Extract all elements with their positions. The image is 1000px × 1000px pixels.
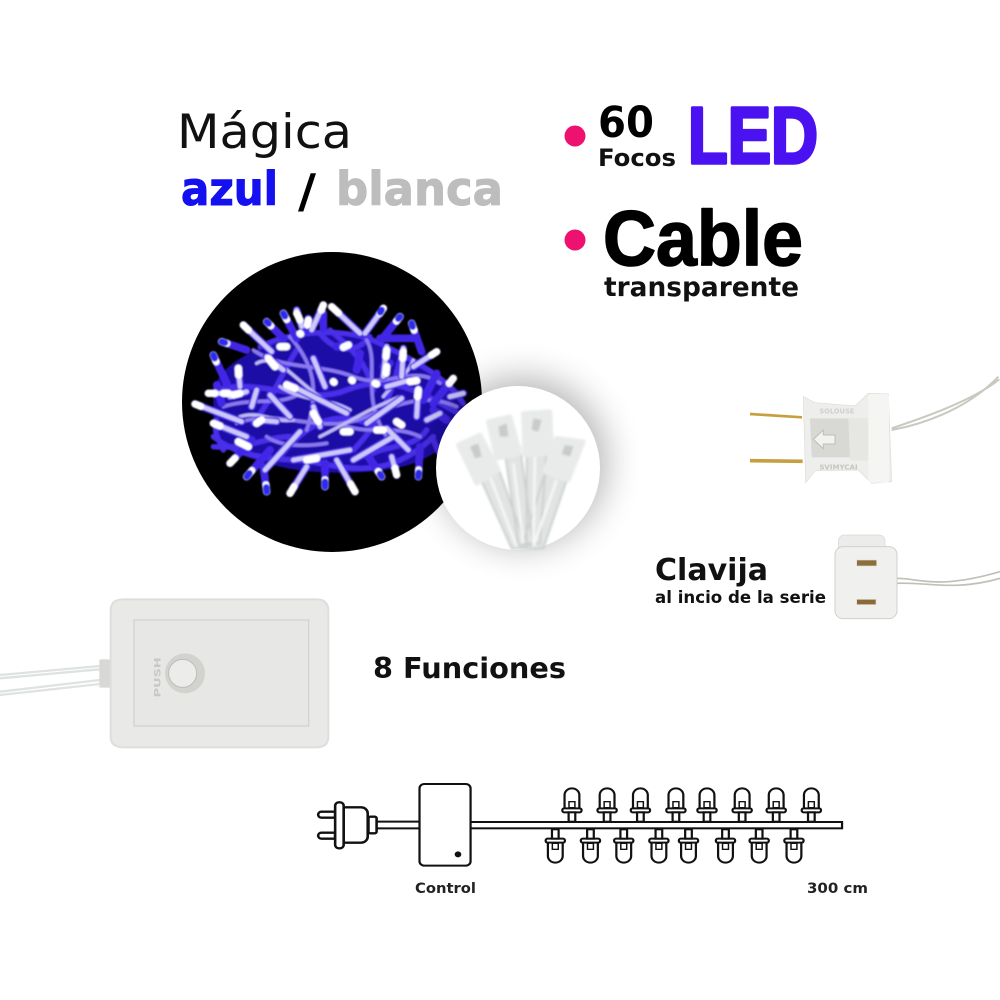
diagram upper bulbs bbox=[562, 788, 821, 822]
diagram control box bbox=[420, 784, 471, 866]
title: Mágica azul / blanca: blanca bbox=[336, 162, 503, 216]
title: Mágica azul / blanca: Mágica bbox=[177, 105, 352, 160]
photo: plug with prongs: SOLOUSE bbox=[819, 407, 855, 415]
bullet: 60 focos LED: 60 bbox=[598, 98, 654, 148]
photo: close-up of clear LED bulbs in white circle with shadow bbox=[436, 378, 606, 550]
controller body bbox=[111, 599, 328, 747]
diagram plug bbox=[318, 802, 420, 848]
bullet: 60 focos LED: LED bbox=[688, 91, 818, 180]
label: 8 funciones: 8 Funciones bbox=[373, 652, 566, 685]
diagram lower bulbs bbox=[546, 829, 804, 863]
title: Mágica azul / blanca bbox=[177, 105, 503, 218]
bullet: cable transparente bbox=[564, 194, 803, 303]
label: clavija al inicio de la serie bbox=[655, 553, 826, 607]
label: control: Control bbox=[415, 881, 476, 897]
photo: socket bbox=[835, 535, 1000, 619]
label: 300 cm: 300 cm bbox=[807, 881, 868, 897]
diagram wire bbox=[470, 822, 842, 828]
bullet: 60 focos LED: Focos bbox=[598, 144, 676, 172]
photo: plug with prongs bbox=[750, 377, 999, 483]
push button bbox=[165, 653, 205, 693]
clear bulbs bbox=[458, 412, 583, 548]
bullet: cable transparente: Cable bbox=[603, 194, 803, 282]
photo: blue and white LED cluster on black circle bbox=[182, 252, 482, 552]
title: Mágica azul / blanca: azul bbox=[181, 162, 278, 216]
bullet: 60 focos LED bbox=[564, 91, 818, 180]
label: clavija al inicio de la serie: al incio de la serie bbox=[655, 588, 826, 607]
photo: white controller box with push button bbox=[0, 599, 328, 747]
photo: white controller box with push button: PUSH bbox=[154, 657, 164, 697]
photo: plug with prongs: SVIMYCAI bbox=[819, 463, 858, 471]
title: Mágica azul / blanca: / bbox=[298, 164, 316, 218]
diagram: wiring of plug, control and LED string bbox=[318, 784, 842, 866]
label: clavija al inicio de la serie: Clavija bbox=[655, 553, 768, 588]
plug body bbox=[803, 393, 892, 483]
bullet: cable transparente: transparente bbox=[604, 272, 799, 303]
light strands cluster bbox=[195, 305, 464, 493]
